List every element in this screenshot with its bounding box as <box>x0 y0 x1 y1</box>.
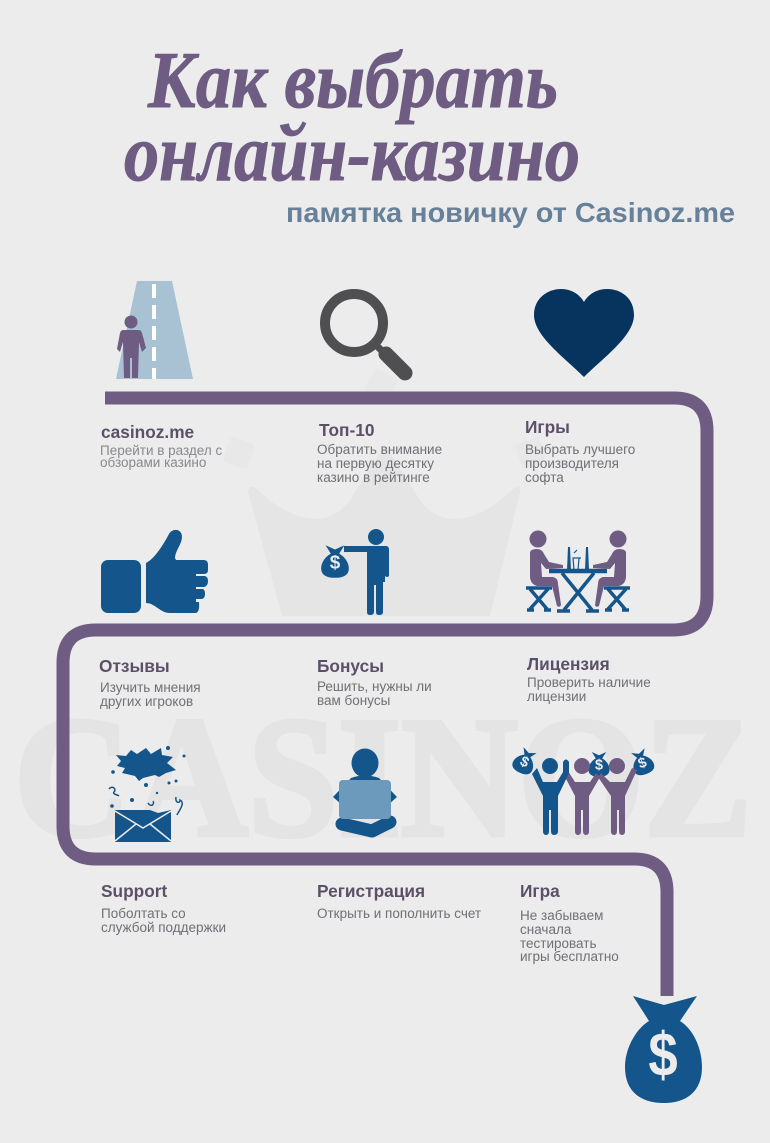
step: Бонусы: Бонусы <box>317 656 384 676</box>
icon: magnifying glass <box>325 294 405 373</box>
title <box>124 37 580 198</box>
icon: road with person <box>116 281 193 379</box>
step: Бонусы: вам бонусы <box>317 693 390 708</box>
step: Игра <box>520 881 619 964</box>
step: Support: службой поддержки <box>101 920 226 935</box>
step: Топ-10 <box>317 420 442 485</box>
step: Лицензия: лицензии <box>527 689 586 704</box>
step: Топ-10: казино в рейтинге <box>317 470 430 485</box>
icon: person with laptop <box>333 748 397 831</box>
step: Игра: Игра <box>520 881 560 901</box>
step: Топ-10: на первую десятку <box>317 456 434 471</box>
step: Лицензия: Лицензия <box>527 654 610 674</box>
step: casinoz.me: Перейти в раздел с <box>100 443 222 458</box>
icon: thumbs up <box>101 530 208 613</box>
subtitle: памятка новичку от Casinoz.me <box>286 197 735 228</box>
icon: man holding money bag <box>321 529 389 615</box>
step: Игра: игры бесплатно <box>520 949 619 964</box>
step: Регистрация: Открыть и пополнить счет <box>317 906 481 921</box>
step: Игра: Не забываем <box>520 908 603 923</box>
icon: final money bag <box>625 996 702 1103</box>
step: Регистрация: Регистрация <box>317 881 425 901</box>
step: Support: Поболтать со <box>101 906 186 921</box>
step: Отзывы: Изучить мнения <box>100 680 201 695</box>
step: casinoz.me: casinoz.me <box>101 422 195 442</box>
step: Лицензия: Проверить наличие <box>527 675 651 690</box>
step: Лицензия <box>527 654 651 704</box>
step: Топ-10: Топ-10 <box>319 420 374 440</box>
watermark: crown <box>223 367 547 616</box>
step: Игры: производителя <box>525 456 619 471</box>
step: Игры: Выбрать лучшего <box>525 442 635 457</box>
step: Игра: тестировать <box>520 936 596 951</box>
step: Регистрация <box>317 881 481 921</box>
step: Отзывы: других игроков <box>100 694 193 709</box>
icon: heart <box>534 289 634 377</box>
title: онлайн-казино <box>124 110 580 198</box>
icon: two people at table <box>526 530 630 611</box>
step: Игра: сначала <box>520 922 572 937</box>
title: Как выбрать <box>147 37 558 125</box>
step: Support <box>101 881 226 935</box>
step: Support: Support <box>101 881 167 901</box>
step: Игры <box>525 417 635 485</box>
step: casinoz.me <box>100 422 222 470</box>
icon: final money bag: $ <box>648 1021 678 1090</box>
step: Отзывы <box>99 656 201 709</box>
step: casinoz.me: обзорами казино <box>100 455 206 470</box>
step: Бонусы <box>317 656 432 708</box>
step: Отзывы: Отзывы <box>99 656 170 676</box>
icon: exploding envelope <box>109 746 186 842</box>
step: Игры: софта <box>525 470 564 485</box>
step: Топ-10: Обратить внимание <box>317 442 442 457</box>
step: Бонусы: Решить, нужны ли <box>317 679 432 694</box>
icon: three people with money bags <box>510 746 656 835</box>
winding path <box>63 398 707 996</box>
step: Игры: Игры <box>525 417 570 437</box>
